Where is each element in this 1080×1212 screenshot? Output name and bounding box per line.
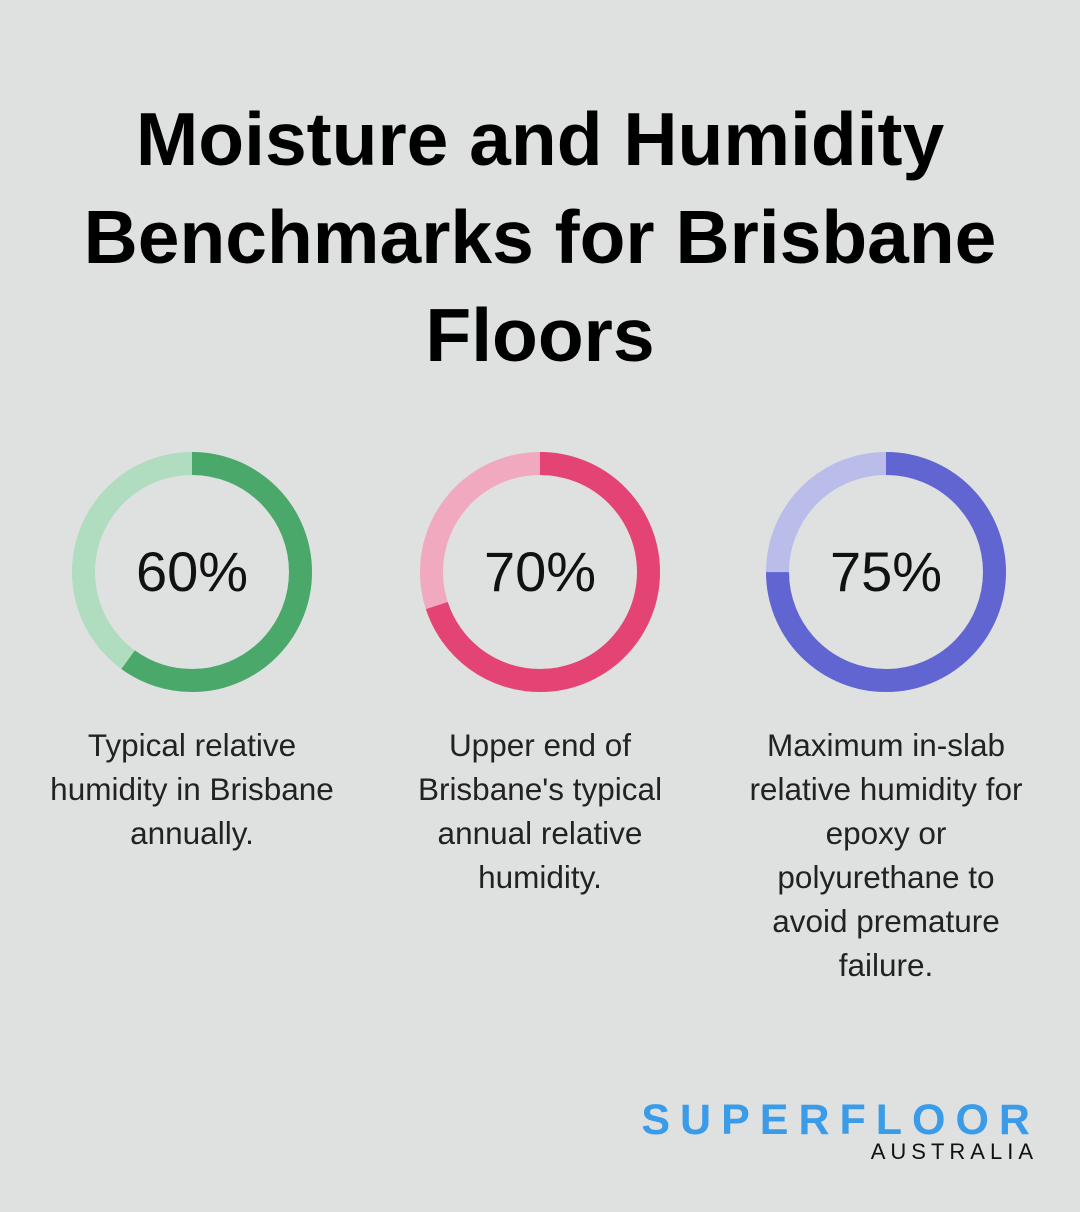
donut: 75%: 75%	[830, 540, 942, 603]
title: Floors	[425, 293, 655, 377]
donut: 60%: 60%	[136, 540, 248, 603]
text: 75% description: Maximum in-slab relative humidity for epoxy or polyurethane to avoid premature failure.	[749, 727, 1023, 983]
donut: 60%	[72, 452, 312, 692]
text: 70% description: Upper end of Brisbane's typical annual relative humidity.	[418, 727, 662, 895]
title: Moisture and Humidity	[136, 97, 944, 181]
title	[84, 97, 996, 377]
logo: SUPERFLOOR	[641, 1096, 1040, 1144]
donut: 70%: 70%	[484, 540, 596, 603]
text: 60% description: Typical relative humidity in Brisbane annually.	[50, 727, 334, 851]
donut: 70%	[420, 452, 660, 692]
title: Benchmarks for Brisbane	[84, 195, 996, 279]
logo: AUSTRALIA	[871, 1139, 1038, 1164]
donut: 75%	[766, 452, 1006, 692]
